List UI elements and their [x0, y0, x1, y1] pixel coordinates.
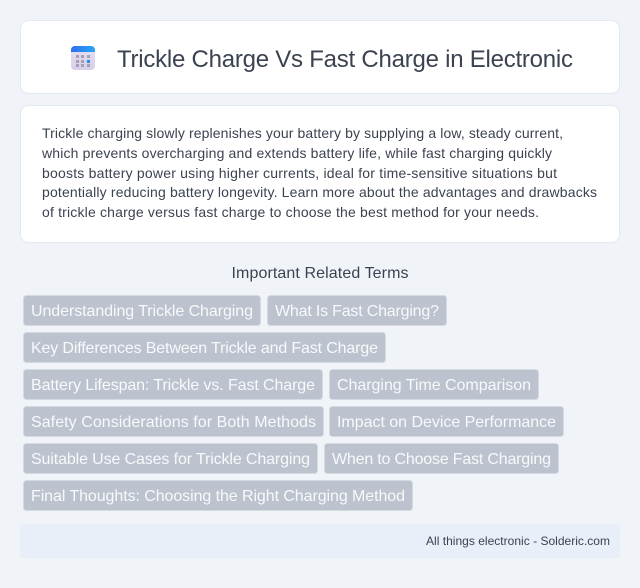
panel: header card [20, 20, 620, 94]
tag: charging time comparison: Charging Time Comparison [337, 377, 531, 394]
description text: Trickle charging slowly replenishes your battery by supplying a low, steady current, [42, 125, 563, 141]
description text [41, 125, 597, 220]
tag: impact on device performance [330, 406, 564, 436]
tag: battery lifespan: Battery Lifespan: Trickle vs. Fast Charge [31, 377, 315, 394]
tag: understanding trickle charging: Understanding Trickle Charging [31, 303, 253, 320]
description text: potentially reducing battery longevity. Learn more about the advantages and drawbacks [42, 184, 597, 200]
tag: battery lifespan [24, 370, 322, 400]
description text: boosts battery power using higher currents, ideal for time-sensitive situations but [42, 165, 557, 181]
tag: safety considerations: Safety Considerations for Both Methods [31, 414, 316, 431]
tag: charging time comparison [330, 370, 538, 400]
tag: impact on device performance: Impact on Device Performance [337, 414, 556, 431]
tag: when to choose fast charging: When to Choose Fast Charging [332, 451, 551, 468]
footer [20, 524, 620, 558]
description text: which prevents overcharging and extends battery life, while fast charging quickly [41, 145, 552, 161]
tag: key differences: Key Differences Between Trickle and Fast Charge [31, 340, 378, 357]
tag: key differences [24, 332, 386, 362]
tag: suitable use cases: Suitable Use Cases for Trickle Charging [31, 451, 310, 468]
description text: of trickle charge versus fast charge to choose the best method for your needs. [42, 204, 539, 220]
tag: what is fast charging [268, 296, 446, 326]
tag: when to choose fast charging [324, 444, 558, 474]
tag: safety considerations [24, 406, 324, 436]
icon: calendar [71, 46, 95, 70]
heading: important related terms: Important Related Terms [232, 265, 408, 282]
tag: what is fast charging: What Is Fast Charging? [275, 303, 439, 320]
tag: final thoughts [24, 480, 412, 510]
title: Trickle Charge Vs Fast Charge in Electronic [117, 46, 573, 73]
footer: All things electronic - Solderic.com [426, 534, 610, 548]
panel: description card [20, 106, 620, 242]
tag: final thoughts: Final Thoughts: Choosing the Right Charging Method [31, 488, 405, 505]
tag: suitable use cases [24, 444, 318, 474]
tag: understanding trickle charging [24, 296, 260, 326]
